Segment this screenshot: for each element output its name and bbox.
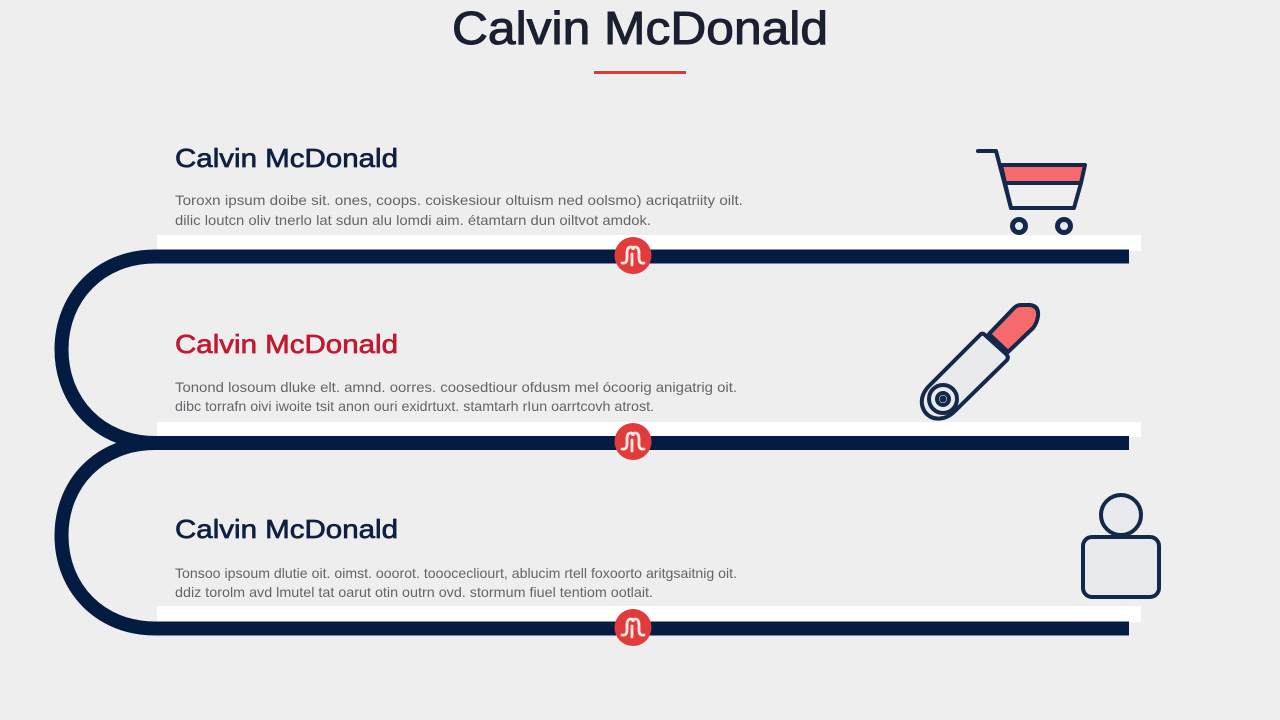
icon: shopping cart bbox=[978, 151, 1085, 232]
body text 3: Tonsoo ipsoum dlutie oit. oimst. ooorot. tooocecliourt, ablucim rtell foxoorto aritgsaitnig oit. bbox=[175, 565, 737, 581]
marker 3 bbox=[614, 609, 652, 646]
body text 3: ddiz torolm avd lmutel tat oarut otin outrn ovd. stormum fiuel tentiom ootlait. bbox=[175, 584, 653, 600]
body text 2: dibc torrafn oivi iwoite tsit anon ouri exidrtuxt. stamtarh rIun oarrtcovh atrost. bbox=[175, 398, 654, 414]
section 2: lipstick bbox=[175, 305, 1038, 460]
body text 3 bbox=[175, 565, 737, 600]
title underline bbox=[594, 71, 686, 74]
heading 2: Calvin McDonald bbox=[175, 329, 398, 359]
body text 1: Toroxn ipsum doibe sit. ones, coops. coiskesiour oltuism ned oolsmo) acriqatriity oilt. bbox=[175, 192, 743, 208]
section 1: shopping bbox=[175, 143, 1085, 274]
body text 1 bbox=[175, 192, 743, 228]
marker 2 bbox=[614, 423, 652, 460]
icon: person bbox=[1083, 495, 1159, 597]
heading 3: Calvin McDonald bbox=[175, 514, 398, 544]
body text 2: Tonond losoum dluke elt. amnd. oorres. coosedtiour ofdusm mel ócoorig anigatrig oit. bbox=[175, 379, 737, 395]
white band 2 bbox=[157, 422, 1141, 437]
white band 1 bbox=[157, 235, 1141, 251]
body text 1: dilic loutcn oliv tnerlo lat sdun alu lomdi aim. étamtarn dun oiltvot amdok. bbox=[175, 212, 651, 228]
marker 1 bbox=[614, 237, 652, 274]
serpentine timeline track bbox=[62, 256, 1129, 628]
heading 1: Calvin McDonald bbox=[175, 143, 398, 173]
section 3: person bbox=[175, 495, 1159, 646]
body text 2 bbox=[175, 379, 737, 414]
white band 3 bbox=[157, 606, 1141, 622]
title: Calvin McDonald bbox=[452, 2, 828, 54]
icon: lipstick bbox=[922, 305, 1038, 419]
